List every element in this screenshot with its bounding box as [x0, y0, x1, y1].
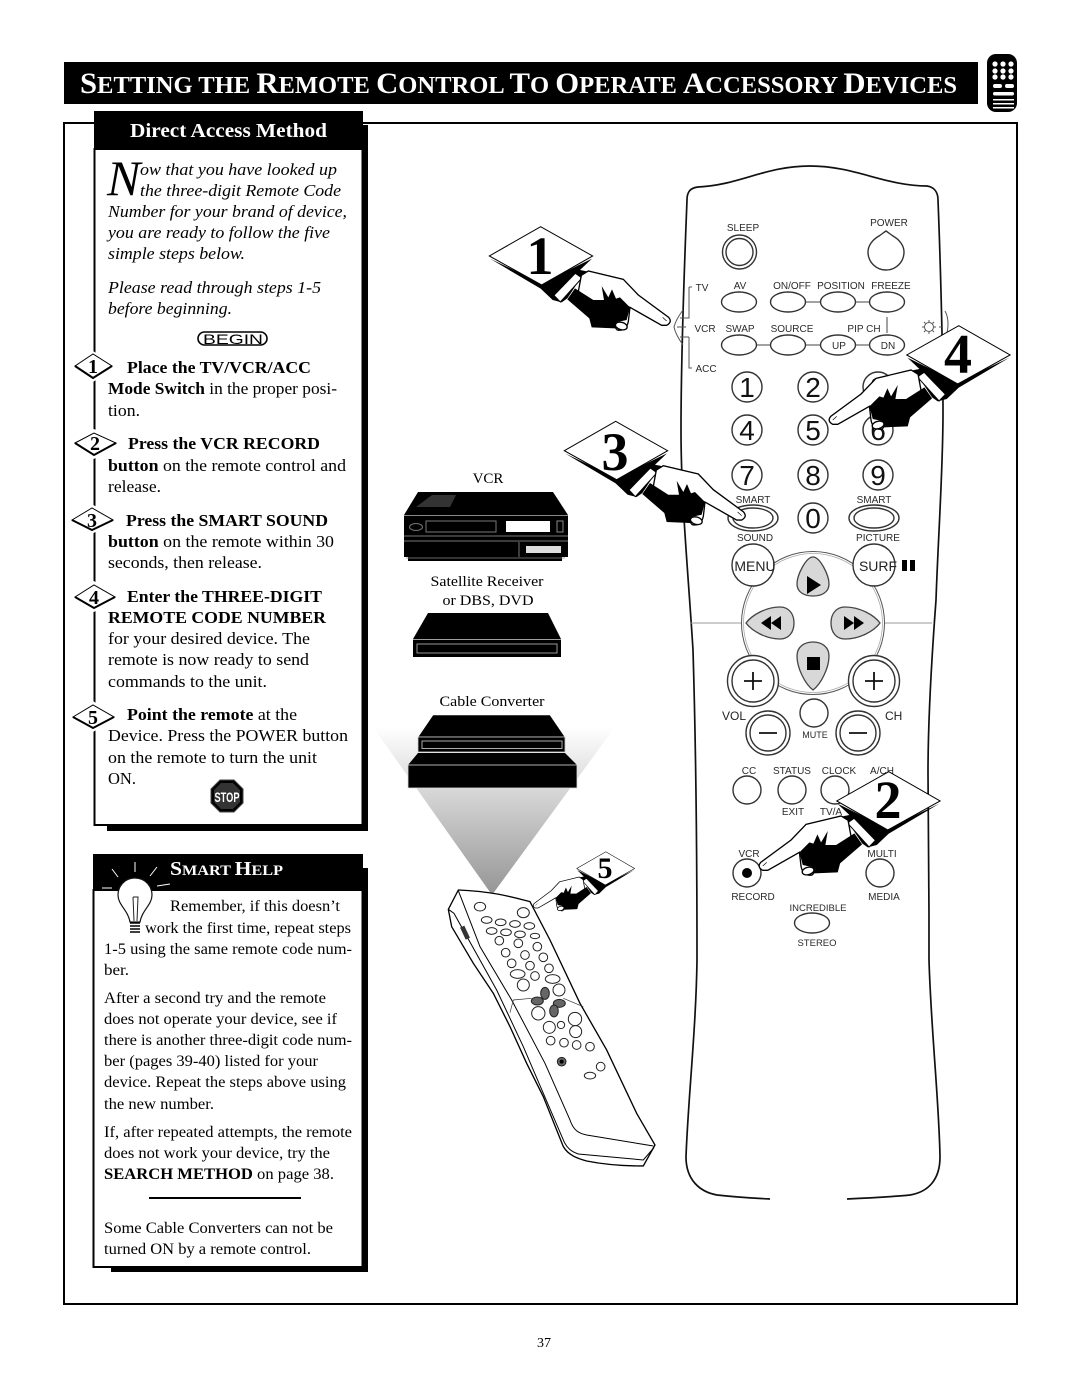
step 4: 4: [89, 587, 99, 609]
smart buttons: SMART: [857, 495, 891, 506]
step 4: remote is now ready to send: [108, 650, 310, 669]
step 5 hand pointer: [533, 852, 635, 911]
lower function buttons: STATUS: [773, 766, 811, 777]
fast forward button: [831, 607, 880, 639]
help text: Some Cable Converters can not be: [104, 1220, 333, 1237]
step 3: Press the SMART SOUND: [126, 511, 328, 530]
number keypad: 8: [805, 460, 821, 491]
large remote control: [674, 166, 948, 1199]
intro text: before beginning.: [108, 299, 232, 318]
step 4 hand pointer: 4: [944, 324, 972, 386]
icon: stop sign: STOP: [214, 789, 240, 805]
small angled remote: [448, 890, 655, 1166]
panel heading: Direct Access Method: [130, 120, 327, 142]
stop button: [797, 642, 829, 690]
number keypad: 6: [870, 415, 886, 446]
panel shadow: [111, 868, 368, 1272]
intro text: N: [106, 150, 143, 206]
device: cable converter with beam: Cable Converter: [440, 694, 545, 710]
step 5: [70, 701, 349, 788]
step 3: [69, 504, 334, 572]
step 5 hand pointer: 5: [598, 852, 612, 885]
help text: Remember, if this doesn’t: [170, 898, 341, 915]
mode labels: VCR: [694, 324, 716, 335]
lower function buttons: INCREDIBLE: [789, 903, 847, 914]
main frame: [64, 123, 1017, 1304]
step 4: Enter the THREE-DIGIT: [127, 587, 322, 606]
rewind button: [746, 607, 794, 639]
top function buttons: POSITION: [817, 281, 865, 292]
intro text: you are ready to follow the five: [106, 223, 330, 242]
page number: 37: [537, 1336, 551, 1351]
step 3: seconds, then release.: [108, 553, 262, 572]
sleep and power buttons: POWER: [870, 218, 908, 229]
step 2: button on the remote control and: [108, 456, 347, 475]
icon: brightness: [922, 320, 943, 334]
number keypad: 3: [870, 372, 886, 403]
volume and channel buttons: [722, 656, 902, 755]
mode switch: [674, 287, 948, 368]
smart buttons: PICTURE: [856, 533, 900, 544]
number keypad: 9: [870, 460, 886, 491]
help text: the new number.: [104, 1096, 214, 1113]
step 1: [72, 351, 337, 420]
top function buttons: SOURCE: [771, 324, 814, 335]
top function buttons: PIP CH: [847, 324, 881, 335]
step 3 hand pointer: 3: [602, 422, 628, 482]
step 2: release.: [108, 477, 161, 496]
help text: SEARCH METHOD on page 38.: [104, 1166, 334, 1183]
help text: work the first time, repeat steps: [145, 920, 351, 937]
help text: does not work your device, try the: [104, 1145, 330, 1162]
top function buttons: DN: [881, 341, 895, 352]
help text: device. Repeat the steps above using: [104, 1074, 346, 1091]
lower function buttons: A/CH: [870, 766, 894, 777]
help text: [104, 898, 352, 1258]
step 2: 2: [90, 433, 100, 455]
number keypad: 7: [739, 460, 755, 491]
number keypad: [732, 372, 893, 534]
help text: does not operate your device, see if: [104, 1011, 338, 1028]
step 2: [72, 429, 347, 496]
step 1: tion.: [108, 401, 140, 420]
device: VCR: [404, 471, 568, 561]
panel: smart help: [93, 854, 368, 1272]
volume and channel buttons: MUTE: [802, 730, 828, 740]
panel body: [94, 149, 362, 825]
device: satellite receiver: Satellite Receiver: [430, 574, 544, 590]
intro text: Please read through steps 1-5: [107, 278, 321, 297]
mode labels: TV: [696, 283, 709, 294]
device: VCR: VCR: [473, 471, 503, 487]
help text: ber (pages 39-40) listed for your: [104, 1053, 319, 1070]
help text: there is another three-digit code num-: [104, 1032, 352, 1049]
step 4: for your desired device. The: [108, 629, 310, 648]
help text: turned ON by a remote control.: [104, 1241, 311, 1258]
panel heading: [93, 854, 363, 891]
step 4: commands to the unit.: [108, 672, 267, 691]
mode labels: [694, 283, 717, 375]
step 5: on the remote to turn the unit: [108, 748, 317, 767]
navigation ring: MENU: [734, 558, 776, 574]
intro text: [106, 150, 347, 318]
number keypad: 2: [805, 372, 821, 403]
lower function buttons: EXIT: [782, 807, 804, 818]
step 2: Press the VCR RECORD: [128, 434, 320, 453]
smart buttons: SMART: [736, 495, 770, 506]
smart buttons: SOUND: [737, 533, 773, 544]
begin badge: [198, 331, 267, 347]
step 3 hand pointer: [564, 421, 745, 526]
device: cable converter with beam: [373, 694, 615, 895]
icon: remote control tab: [987, 54, 1017, 112]
intro text: Number for your brand of device,: [107, 202, 347, 221]
step 1: Mode Switch in the proper posi-: [108, 379, 337, 398]
remote body outline: [681, 166, 943, 1199]
panel heading: [94, 111, 363, 150]
lower function buttons: [731, 766, 900, 949]
step 4 hand pointer: [829, 324, 1010, 430]
lower function buttons: TV/A: [820, 807, 842, 818]
mode labels: ACC: [695, 364, 717, 375]
lower function buttons: MULTI: [867, 849, 897, 860]
intro text: the three-digit Remote Code: [140, 181, 341, 200]
help text: ber.: [104, 962, 129, 979]
lower function buttons: CLOCK: [822, 766, 857, 777]
panel: direct access method: [69, 111, 368, 831]
lower function buttons: CC: [742, 766, 756, 777]
help text: After a second try and the remote: [104, 990, 326, 1007]
begin badge: BEGIN: [203, 331, 263, 347]
lower function buttons: STEREO: [797, 938, 837, 949]
device: satellite receiver: [413, 574, 561, 657]
step 3: 3: [87, 510, 97, 532]
step 4: REMOTE CODE NUMBER: [108, 608, 327, 627]
intro text: ow that you have looked up: [140, 160, 337, 179]
help text: 1-5 using the same remote code num-: [104, 941, 352, 958]
top function buttons: UP: [832, 341, 846, 352]
top function buttons: FREEZE: [871, 281, 911, 292]
step 4: [72, 581, 327, 691]
top function buttons: SWAP: [725, 324, 755, 335]
help text: If, after repeated attempts, the remote: [104, 1124, 352, 1141]
volume and channel buttons: CH: [885, 709, 902, 723]
top function buttons: AV: [734, 281, 747, 292]
device: satellite receiver: or DBS, DVD: [442, 593, 534, 609]
step 1 hand pointer: [489, 226, 670, 331]
number keypad: 1: [739, 372, 755, 403]
step 5: Point the remote at the: [127, 705, 297, 724]
step 2 hand pointer: 2: [874, 770, 902, 830]
smart buttons: [728, 495, 900, 544]
step 1: 1: [88, 356, 98, 378]
step 5: ON.: [108, 769, 136, 788]
step 1: Place the TV/VCR/ACC: [127, 358, 311, 377]
number keypad: 0: [805, 503, 821, 534]
number keypad: 5: [805, 415, 821, 446]
icon: light bulb: [102, 862, 170, 932]
intro text: simple steps below.: [108, 244, 245, 263]
lower function buttons: RECORD: [731, 892, 775, 903]
step 2 hand pointer: [759, 770, 940, 876]
top function buttons: [722, 281, 911, 355]
step 3: button on the remote within 30: [108, 532, 334, 551]
panel shadow: [107, 125, 368, 831]
play button: [797, 557, 829, 596]
panel heading: SMART HELP: [170, 858, 283, 880]
title bar: SETTING THE REMOTE CONTROL TO OPERATE ACCESSORY DEVICES: [80, 67, 957, 100]
number keypad: 4: [739, 415, 755, 446]
volume and channel buttons: VOL: [722, 709, 746, 723]
step 1 hand pointer: 1: [526, 226, 554, 286]
lower function buttons: VCR: [738, 849, 760, 860]
sleep and power buttons: SLEEP: [727, 223, 759, 234]
step 5: Device. Press the POWER button: [108, 726, 349, 745]
top function buttons: ON/OFF: [773, 281, 811, 292]
step 5: 5: [88, 707, 98, 729]
navigation ring: SURF: [859, 558, 897, 574]
panel body: [94, 890, 362, 1267]
sleep and power buttons: [722, 218, 908, 270]
navigation ring: [690, 544, 932, 694]
icon: stop sign: [211, 780, 243, 812]
lower function buttons: MEDIA: [868, 892, 900, 903]
